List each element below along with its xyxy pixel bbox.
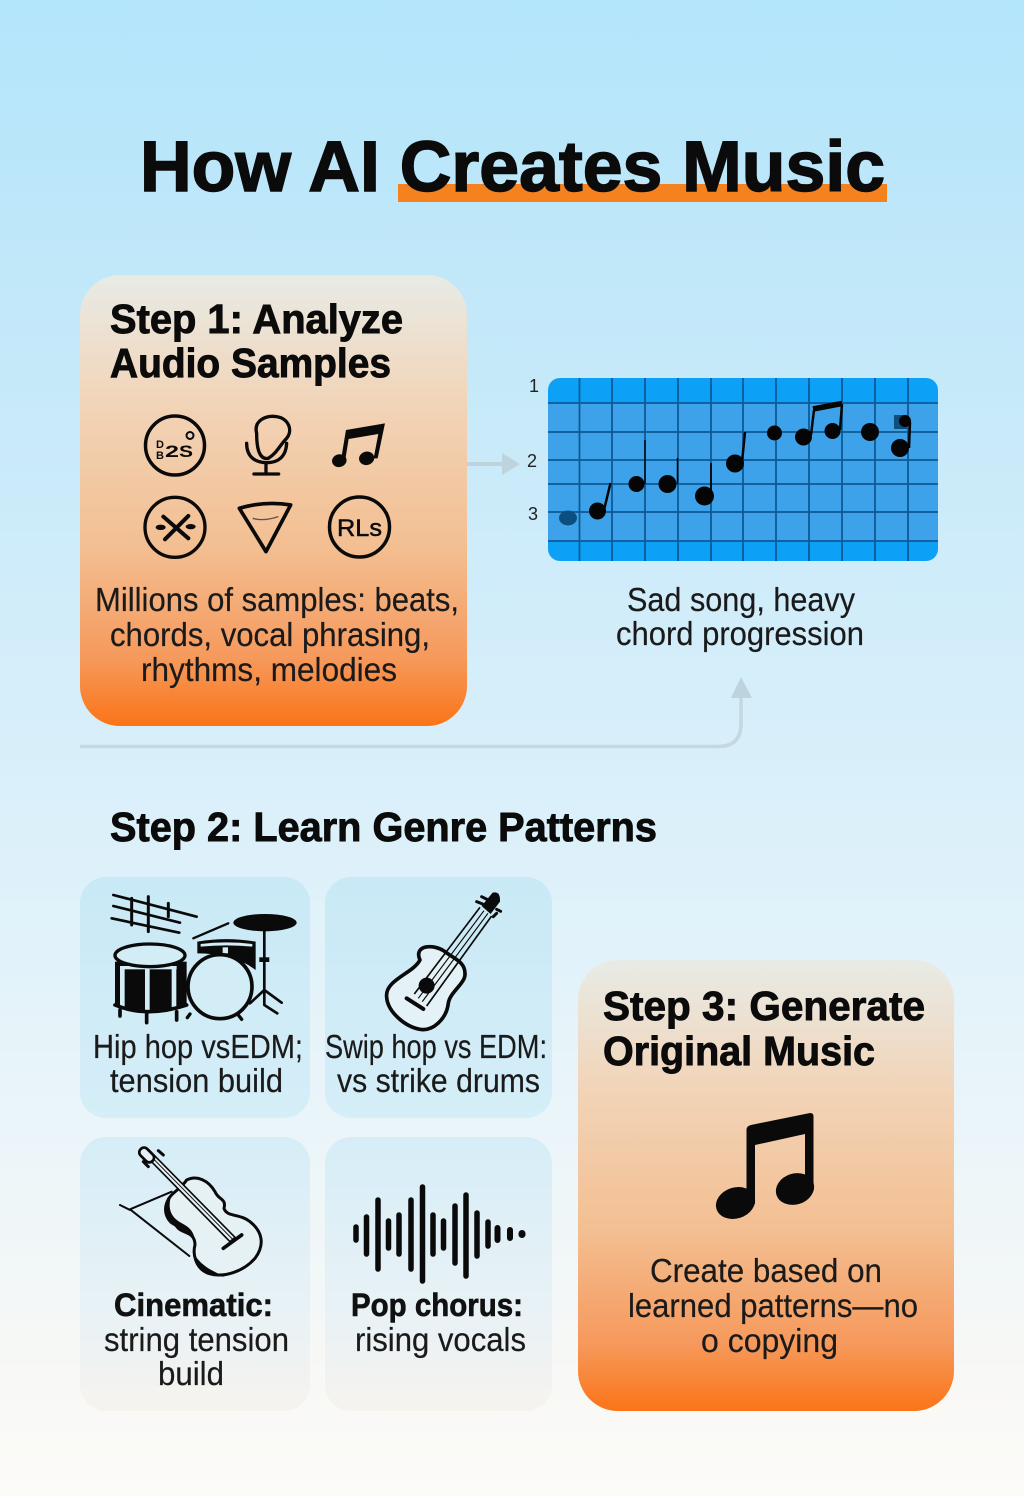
panel: cinematic bbox=[80, 1137, 310, 1411]
icon: RLs circle bbox=[330, 497, 390, 557]
icon: beats circle: D bbox=[156, 439, 164, 451]
genre text bbox=[325, 1028, 547, 1099]
genre text: string tension bbox=[104, 1321, 289, 1358]
genre text: Cinematic: bbox=[114, 1287, 273, 1323]
chart: note grid bbox=[548, 378, 938, 561]
step 3 description: o copying bbox=[701, 1322, 838, 1359]
step 1 description: chords, vocal phrasing, bbox=[110, 616, 430, 653]
step 3 heading: Original Music bbox=[603, 1028, 875, 1074]
icon: drum kit bbox=[112, 895, 297, 1023]
step 1 description: rhythms, melodies bbox=[141, 651, 397, 688]
genre text: tension build bbox=[110, 1062, 283, 1099]
chart caption bbox=[616, 581, 864, 652]
step 3 description: learned patterns—no bbox=[628, 1287, 918, 1324]
panel: hip hop vs EDM bbox=[80, 877, 310, 1118]
step 1 heading: Audio Samples bbox=[110, 340, 391, 386]
icon: large music note bbox=[712, 1113, 818, 1224]
step 1 description bbox=[95, 581, 459, 688]
icon: crossed circle bbox=[145, 497, 205, 557]
genre text: build bbox=[158, 1355, 224, 1392]
genre text: rising vocals bbox=[355, 1321, 526, 1358]
panel: step 1 analyze audio samples bbox=[80, 275, 467, 726]
icon: sound waveform bbox=[356, 1187, 522, 1281]
genre text: Hip hop vsEDM; bbox=[93, 1028, 303, 1065]
icon: microphone bbox=[247, 416, 290, 474]
chart caption: Sad song, heavy bbox=[627, 581, 855, 618]
title text: How AI Creates Music bbox=[140, 128, 885, 207]
axis labels: 3 bbox=[528, 504, 538, 524]
icon: music note bbox=[331, 423, 385, 469]
genre text bbox=[351, 1287, 526, 1358]
genre text: Pop chorus: bbox=[351, 1287, 523, 1323]
chart caption: chord progression bbox=[616, 615, 864, 652]
genre text bbox=[93, 1028, 303, 1099]
icon: triangle wedge bbox=[239, 503, 291, 552]
icon: guitar bbox=[387, 892, 501, 1030]
icon: beats circle: 2 bbox=[165, 442, 179, 461]
step 1 heading bbox=[110, 296, 403, 386]
step 3 description: Create based on bbox=[650, 1252, 882, 1289]
arrow: step 1 up to chart caption bbox=[80, 677, 752, 746]
notes bbox=[559, 404, 911, 526]
genre text: vs strike drums bbox=[337, 1062, 540, 1099]
panel: pop chorus bbox=[325, 1137, 552, 1411]
step 3 description bbox=[628, 1252, 918, 1359]
step 2 heading: Step 2: Learn Genre Patterns bbox=[110, 804, 657, 850]
icon: RLs circle: RLs bbox=[337, 515, 382, 542]
step 1 description: Millions of samples: beats, bbox=[95, 581, 459, 618]
panel: swip hop vs EDM bbox=[325, 877, 552, 1118]
axis labels: 1 bbox=[529, 376, 539, 396]
panel: step 3 generate original music bbox=[578, 960, 954, 1411]
step 3 heading bbox=[603, 983, 925, 1074]
icon: beats circle: S bbox=[179, 442, 193, 461]
title bbox=[140, 128, 887, 207]
icon: violin bbox=[120, 1146, 261, 1277]
step 3 heading: Step 3: Generate bbox=[603, 983, 925, 1029]
arrow: step 1 to note grid bbox=[467, 453, 520, 475]
genre text bbox=[104, 1287, 289, 1392]
axis labels: 2 bbox=[527, 451, 537, 471]
icon: beats circle bbox=[146, 416, 204, 475]
axis labels bbox=[527, 376, 539, 524]
step 1 heading: Step 1: Analyze bbox=[110, 296, 403, 342]
title underline highlight bbox=[398, 184, 887, 202]
genre text: Swip hop vs EDM: bbox=[325, 1028, 547, 1065]
icon: beats circle: B bbox=[156, 450, 164, 462]
